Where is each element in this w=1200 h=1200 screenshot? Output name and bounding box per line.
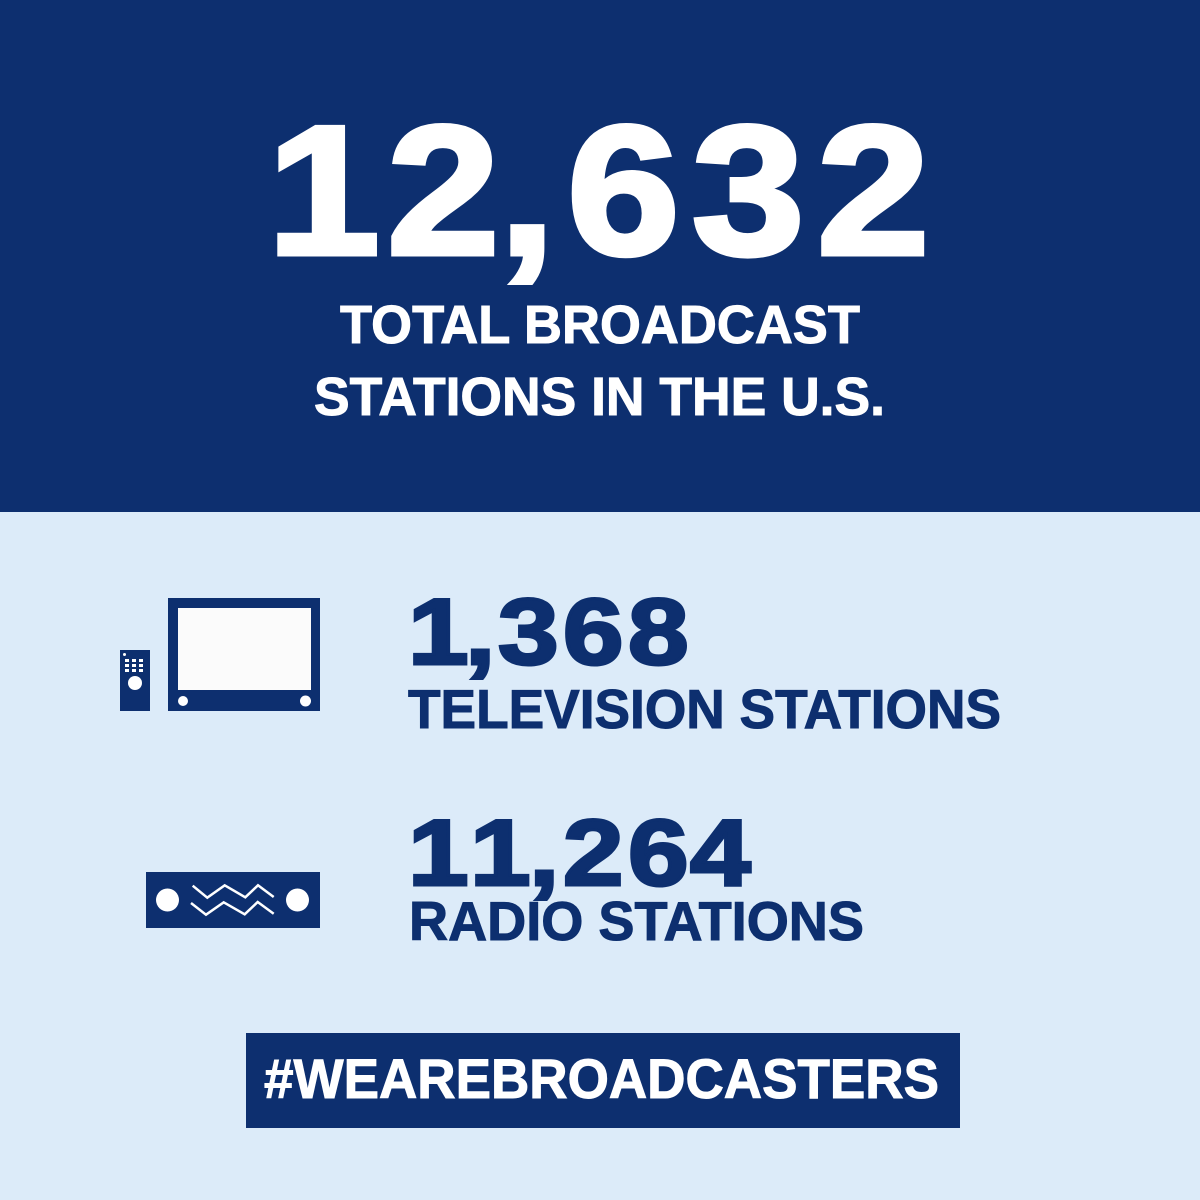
- heading line two: STATIONS IN THE U.S.: [314, 367, 885, 427]
- television label: TELEVISION STATIONS: [408, 678, 1001, 740]
- heading line one: TOTAL BROADCAST: [340, 295, 860, 355]
- panel: total stations header: [0, 0, 1200, 512]
- television number: 1,368: [408, 579, 689, 684]
- icon: television and remote: [120, 598, 320, 711]
- icon: radio: [146, 872, 320, 928]
- hashtag banner: [246, 1033, 960, 1128]
- total number: 12,632: [267, 88, 930, 293]
- radio stat: [408, 800, 864, 952]
- hashtag banner: #WEAREBROADCASTERS: [264, 1047, 939, 1110]
- radio label: RADIO STATIONS: [409, 890, 864, 952]
- radio number: 11,264: [408, 800, 751, 905]
- television stat: [408, 579, 1001, 740]
